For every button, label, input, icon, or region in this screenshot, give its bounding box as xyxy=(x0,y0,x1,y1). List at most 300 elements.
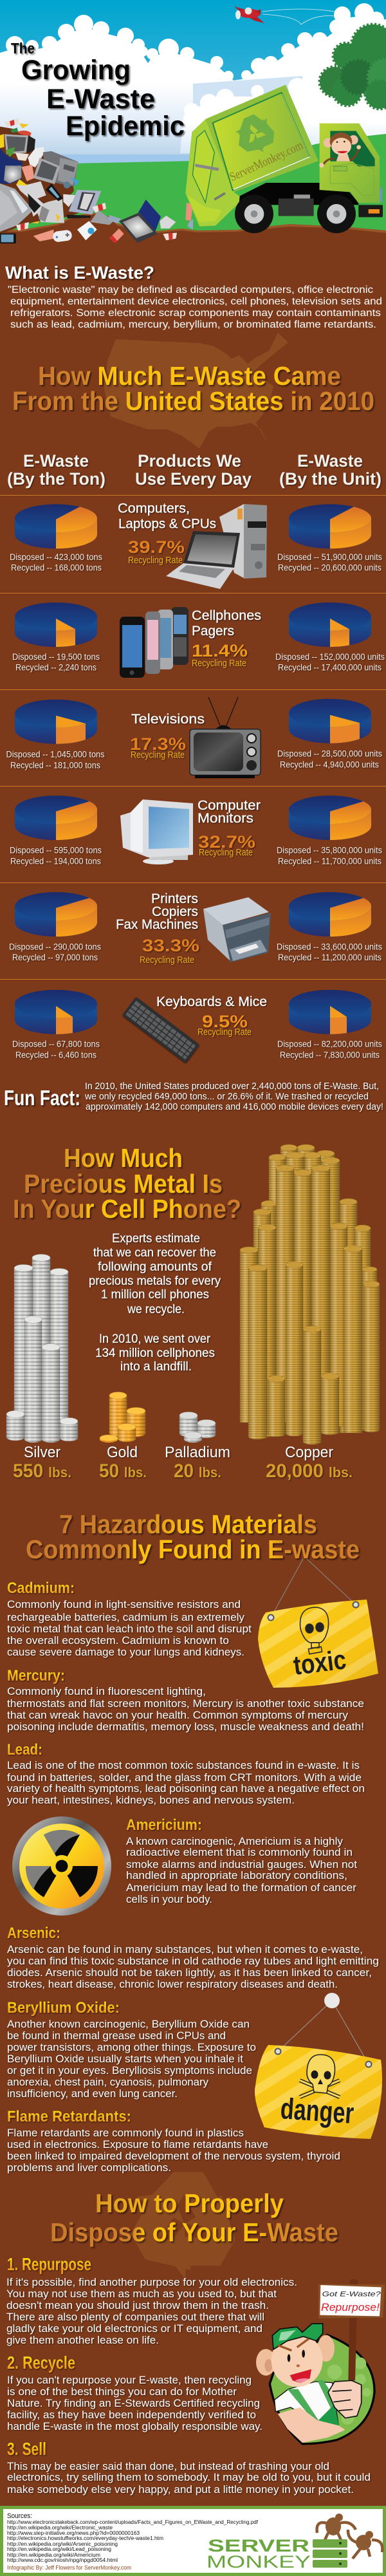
heading: hazardous materials: Commonly Found in E-waste xyxy=(26,1535,360,1564)
tons text xyxy=(12,1040,100,1059)
americium text xyxy=(126,1835,357,1905)
pie: tv by ton xyxy=(15,700,97,744)
recycling rate: Recycling Rate xyxy=(199,848,253,858)
americium text: cells in your body. xyxy=(126,1893,212,1905)
repurpose text: If it's possible, find another purpose for your old electronics. xyxy=(6,2276,297,2288)
hazard: flame retardants xyxy=(7,2108,340,2174)
navy monitor xyxy=(0,148,23,184)
units text: Disposed -- 33,600,000 units xyxy=(277,942,382,951)
pie: computers by ton xyxy=(15,504,97,548)
beryllium text: Beryllium Oxide usually starts when you inhale it xyxy=(7,2053,243,2065)
recycling rate xyxy=(192,641,248,669)
pie: tv by unit xyxy=(289,699,371,743)
experts text: precious metals for every xyxy=(89,1274,221,1288)
product label: Fax Machines xyxy=(116,917,198,932)
pie: computers by unit xyxy=(289,504,371,548)
red cup xyxy=(92,203,106,213)
tons text: Disposed -- 19,500 tons xyxy=(12,652,100,662)
tons text: Recycled -- 194,000 tons xyxy=(10,856,101,866)
sources: http://www.cdc.gov/niosh/npg/npgd0054.html xyxy=(7,2557,118,2563)
product label: Copiers xyxy=(152,904,198,919)
icon: recycle watermark xyxy=(116,2172,251,2291)
product label xyxy=(198,798,261,826)
repurpose text: doesn't mean you should just throw them in the trash. xyxy=(6,2299,269,2311)
units text xyxy=(277,942,382,962)
fact text: we only recycled 649,000 tons... or 26.6% of it. We trashed or recycled xyxy=(84,1091,369,1102)
hazard: cadmium xyxy=(7,1580,252,1658)
sign board: Got E-Waste? xyxy=(322,2290,381,2298)
units text: Recycled -- 7,830,000 units xyxy=(280,1050,380,1059)
tons text: Recycled -- 2,240 tons xyxy=(15,663,96,673)
green field xyxy=(0,134,386,270)
server monkey logo: MONKEY xyxy=(207,2552,311,2571)
sign post xyxy=(348,2279,358,2380)
units text: Recycled -- 17,400,000 units xyxy=(278,663,381,673)
hazard: americium: Americium: xyxy=(126,1816,202,1834)
silver xyxy=(13,1444,71,1482)
container xyxy=(205,85,318,192)
flame retardants text: problems and liver complications. xyxy=(7,2161,171,2174)
row: monitors xyxy=(10,796,382,866)
step 2: recycle xyxy=(7,2353,262,2432)
recycling rate: 9.5% xyxy=(202,1012,248,1031)
units text: Disposed -- 82,200,000 units xyxy=(277,1040,382,1049)
beryllium text xyxy=(7,2018,256,2100)
repurpose text: There are also plenty of companies out there that will xyxy=(6,2311,264,2323)
recycling rate xyxy=(130,734,186,761)
flame retardants text xyxy=(7,2127,340,2174)
clouds xyxy=(0,3,386,167)
dark monitor xyxy=(5,134,35,154)
row: cellphones xyxy=(12,602,385,678)
arsenic text: diodes. Arsenic should not be taken lightly, as it has been linked to cancer, xyxy=(7,1966,372,1979)
truck lettering: ServerMonkey.com xyxy=(228,139,305,184)
title: The xyxy=(11,40,35,57)
recycling rate xyxy=(198,1012,252,1038)
mercury text: poisoning include dermatitis, memory loss, muscle weakness and death! xyxy=(7,1721,364,1733)
arsenic text xyxy=(7,1943,379,1990)
beryllium text: insufficiency, and even lung cancer. xyxy=(7,2087,178,2100)
palladium xyxy=(165,1444,230,1482)
hazard: lead: Lead: xyxy=(7,1741,42,1759)
sources: Sources: xyxy=(7,2512,32,2520)
experts text xyxy=(89,1232,221,1374)
wheels xyxy=(235,194,356,233)
experts text: 1 million cell phones xyxy=(101,1288,209,1302)
sell text xyxy=(7,2460,371,2496)
units text: Recycled -- 4,940,000 units xyxy=(280,760,379,769)
sell text: make somebody else very happy, and put a little money in your pocket. xyxy=(7,2483,354,2496)
silver: Silver xyxy=(24,1444,60,1461)
units text: Disposed -- 28,500,000 units xyxy=(277,749,382,759)
tons text: Recycled -- 97,000 tons xyxy=(12,953,98,962)
tons text xyxy=(12,652,100,673)
smartphone xyxy=(46,183,63,201)
heading: What is E-Waste? xyxy=(5,263,154,283)
icon: printer xyxy=(203,897,271,962)
hazard: americium xyxy=(126,1816,357,1905)
column headers: E-Waste xyxy=(297,451,363,471)
repurpose text xyxy=(6,2276,297,2346)
step 2: recycle: 2. Recycle xyxy=(7,2353,75,2373)
heading: how to dispose: Dispose of Your E-Waste xyxy=(50,2217,338,2247)
grey crt and tower xyxy=(33,151,78,187)
lead text xyxy=(7,1759,365,1806)
cadmium text xyxy=(7,1598,252,1658)
beryllium text: anorexia, chest pain, cyanosis, pulmonary xyxy=(7,2076,208,2088)
lower cloud layer xyxy=(180,76,386,154)
tons text xyxy=(6,750,105,770)
rear door xyxy=(185,119,240,227)
column headers: Products We xyxy=(138,451,241,471)
bumper xyxy=(358,188,383,217)
pile backing xyxy=(0,127,92,234)
monkey body xyxy=(275,2380,362,2443)
experts text: that we can recover the xyxy=(93,1246,216,1260)
definition text xyxy=(8,285,382,330)
units text: Disposed -- 35,800,000 units xyxy=(277,846,382,855)
heading: how to dispose: How to Properly xyxy=(95,2189,284,2218)
flame retardants text: Flame retardants are commonly found in plastics xyxy=(7,2127,244,2139)
monkey mascot with sign xyxy=(256,2279,385,2444)
sources: http://www.electronicstakeback.com/wp-content/uploads/Facts_and_Figures_on_EWaste_and_Recycling.pdf xyxy=(7,2519,259,2525)
cab xyxy=(320,124,380,203)
pie: cellphones by unit xyxy=(289,602,371,647)
header illustration xyxy=(0,0,386,283)
product label: Cellphones xyxy=(192,608,261,623)
title: E-Waste xyxy=(46,84,155,115)
cadmium text: the overall ecosystem. Cadmium is known to xyxy=(7,1634,229,1647)
tons text xyxy=(10,552,102,573)
lead text: found in batteries, solder, and the glass from CRT monitors. With a wide xyxy=(7,1771,362,1784)
experts text: 134 million cellphones xyxy=(95,1347,215,1360)
repurpose text: give them another lease on life. xyxy=(6,2334,159,2346)
product label: Computers, xyxy=(118,501,190,516)
loose items xyxy=(0,221,177,243)
heading: hazardous materials: 7 Hazardous Materials xyxy=(59,1509,317,1539)
units text: Disposed -- 51,900,000 units xyxy=(277,552,382,562)
recycle text: If you can't repurpose your E-waste, then recycling xyxy=(7,2374,252,2386)
pie: printers by unit xyxy=(289,892,371,937)
pie: keyboards by ton xyxy=(15,990,97,1034)
hazard: lead xyxy=(7,1741,365,1806)
step 1: repurpose: 1. Repurpose xyxy=(7,2254,91,2274)
tons text: Disposed -- 423,000 tons xyxy=(10,552,102,562)
recycling rate xyxy=(198,832,255,858)
step 3: sell xyxy=(7,2439,371,2496)
cadmium text: toxic metal that can leach into the soil and disrupt xyxy=(7,1623,252,1635)
palladium: Palladium xyxy=(165,1444,230,1461)
mercury text: that can wreak havoc on your health. Common symptoms of mercury xyxy=(7,1709,349,1721)
sources: http://www.step-initiative.org/news.php?id=0000000163 xyxy=(7,2530,140,2536)
product label: Televisions xyxy=(131,712,205,727)
sign board: Repurpose! xyxy=(321,2301,380,2313)
toxic sign xyxy=(254,1559,383,1690)
icon: tv xyxy=(190,697,261,778)
icon: radiation symbol xyxy=(12,1816,111,1916)
step 3: sell: 3. Sell xyxy=(7,2439,46,2459)
recycling rate: Recycling Rate xyxy=(131,751,185,761)
fun fact xyxy=(4,1081,383,1112)
flame retardants text: used in electronics. Exposure to flame retardants have xyxy=(7,2138,268,2151)
definition text: refrigerators. Some electronic scrap components may contain contaminants xyxy=(10,308,381,319)
junk pile xyxy=(0,118,193,243)
recycle text xyxy=(7,2374,262,2432)
units text xyxy=(275,652,385,673)
icon: crt monitor xyxy=(120,799,193,864)
arsenic text: you can find this toxic substance in old cathode ray tubes and light emitting xyxy=(7,1955,379,1967)
badge circle xyxy=(270,2335,374,2444)
top trash xyxy=(0,118,32,148)
column headers: (By the Ton) xyxy=(7,469,106,489)
heading: precious metal: How Much xyxy=(64,1143,183,1173)
americium text: smoke alarms and industrial gauges. When not xyxy=(126,1858,357,1871)
danger sign xyxy=(251,1993,386,2143)
recycling rate: Recycling Rate xyxy=(198,1027,252,1038)
cadmium text: Commonly found in light-sensitive resistors and xyxy=(7,1598,241,1610)
monkey head xyxy=(256,2324,335,2387)
units text: Recycled -- 11,700,000 units xyxy=(278,856,381,866)
hazard: arsenic: Arsenic: xyxy=(7,1925,60,1942)
icon: keyboard xyxy=(122,996,199,1063)
sell text: This may be easier said than done, but instead of trashing your old xyxy=(7,2460,329,2472)
product label xyxy=(192,608,261,639)
americium text: Americium may lead to the formation of cancer xyxy=(126,1881,356,1894)
pie: cellphones by ton xyxy=(15,602,97,647)
logo server stack xyxy=(313,2539,347,2568)
palladium coin stacks xyxy=(179,1412,216,1442)
fact text xyxy=(84,1081,383,1112)
garbage truck xyxy=(185,85,383,233)
palladium: 20 lbs. xyxy=(174,1461,221,1482)
pie: keyboards by unit xyxy=(289,990,371,1034)
copper stacks xyxy=(240,1144,380,1444)
recycle text: is one of the best things you can do for Mother xyxy=(7,2385,237,2398)
arsenic text: Arsenic can be found in many substances, but when it comes to e-waste, xyxy=(7,1943,363,1955)
product label xyxy=(116,891,198,932)
step 1: repurpose xyxy=(6,2254,297,2346)
panel xyxy=(213,93,309,191)
column headers: E-Waste xyxy=(23,451,89,471)
recycling rate: 39.7% xyxy=(128,537,185,557)
what is e-waste xyxy=(5,263,382,330)
experts text: following amounts of xyxy=(98,1260,212,1274)
lead text: your heart, intestines, kidneys, bones and nervous system. xyxy=(7,1794,295,1806)
sources: http://electronics.howstuffworks.com/everyday-tech/e-waste1.htm xyxy=(7,2535,163,2541)
sign text: toxic: toxic xyxy=(291,1644,347,1681)
sources: http://en.wikipedia.org/wiki/Americium xyxy=(7,2552,100,2558)
product label: Keyboards & Mice xyxy=(156,994,267,1009)
copper: Copper xyxy=(285,1444,333,1461)
heading: precious metal: In Your Cell Phone? xyxy=(13,1194,241,1224)
product label xyxy=(118,501,216,532)
server monkey logo xyxy=(207,2514,382,2571)
experts text: Experts estimate xyxy=(112,1232,200,1246)
recycling rate: Recycling Rate xyxy=(140,955,194,966)
pie: monitors by unit xyxy=(289,796,371,840)
recycle symbol xyxy=(225,107,287,166)
recycling rate: 33.3% xyxy=(142,936,199,955)
hazard: beryllium oxide xyxy=(7,1999,256,2100)
units text xyxy=(277,552,382,573)
experts text: into a landfill. xyxy=(120,1360,192,1374)
airplane xyxy=(234,6,335,24)
product label: Monitors xyxy=(198,811,253,826)
gold xyxy=(99,1444,147,1482)
tons text: Recycled -- 168,000 tons xyxy=(11,563,102,573)
cadmium text: cause severe damage to your lungs and kidneys. xyxy=(7,1646,244,1658)
product label: Printers xyxy=(151,891,198,906)
silver coin stacks xyxy=(6,1254,78,1442)
units text xyxy=(277,1040,382,1059)
recycling rate xyxy=(128,537,185,566)
recycling rate: Recycling Rate xyxy=(128,555,183,566)
definition text: "Electronic waste" may be defined as discarded computers, office electronic xyxy=(8,285,373,295)
row: televisions xyxy=(6,697,382,778)
title: Growing xyxy=(21,55,131,86)
recycle text: facility, as they have been independently verified to xyxy=(7,2409,256,2421)
pie: monitors by ton xyxy=(15,796,97,840)
sources: http://en.wikipedia.org/wiki/Arsenic_poisoning xyxy=(7,2541,118,2547)
hazard: arsenic xyxy=(7,1925,379,1990)
credit: Infographic By: Jeff Flowers for ServerMonkey.com xyxy=(7,2564,131,2571)
column headers: (By the Unit) xyxy=(279,469,381,489)
recycling rate: 17.3% xyxy=(130,734,186,754)
footer xyxy=(0,2506,386,2576)
mercury text xyxy=(7,1685,364,1733)
hazard: beryllium oxide: Beryllium Oxide: xyxy=(7,1999,120,2017)
product label: Laptops & CPUs xyxy=(118,517,216,532)
experts text: we recycle. xyxy=(127,1303,185,1316)
heading: how much e-waste came from the us xyxy=(12,361,374,416)
hazard: mercury xyxy=(7,1667,364,1733)
lead text: Lead is one of the most common toxic substances found in e-waste. It is xyxy=(7,1759,360,1771)
americium text: handled in appropriate laboratory conditions, xyxy=(126,1869,347,1881)
copper: 20,000 lbs. xyxy=(266,1461,353,1482)
tree xyxy=(320,24,386,109)
gears xyxy=(327,2357,371,2425)
mercury text: Commonly found in fluorescent lighting, xyxy=(7,1685,206,1697)
title xyxy=(11,40,185,142)
keyboard xyxy=(66,190,101,218)
recycle text: Nature. Try finding an E-Stewards Certified recycling xyxy=(7,2397,260,2409)
gold: 50 lbs. xyxy=(99,1461,147,1482)
experts text: In 2010, we sent over xyxy=(99,1332,211,1346)
logo text: SERVER xyxy=(208,2536,309,2555)
tons text: Recycled -- 181,000 tons xyxy=(10,760,100,770)
tons text: Recycled -- 6,460 tons xyxy=(15,1050,96,1059)
recycling rate: 32.7% xyxy=(198,832,255,852)
heading: precious metal xyxy=(13,1143,241,1224)
definition text: such as lead, cadmium, mercury, beryllium, or brominated flame retardants. xyxy=(10,319,376,330)
hazard: mercury: Mercury: xyxy=(7,1667,65,1685)
beryllium text: Another known carcinogenic, Beryllium Oxide can xyxy=(7,2018,250,2030)
row: keyboards xyxy=(12,990,382,1063)
americium text: radioactive element that is commonly found in xyxy=(126,1846,353,1858)
recycling rate: 11.4% xyxy=(192,641,248,660)
icon: phones xyxy=(120,607,188,678)
americium text: A known carcinogenic, Americium is a highly xyxy=(126,1835,344,1847)
icon: skull xyxy=(300,2055,340,2097)
units text: Recycled -- 20,600,000 units xyxy=(278,563,381,573)
units text: Recycled -- 11,200,000 units xyxy=(278,953,381,962)
recycling rate xyxy=(140,936,199,966)
chassis xyxy=(239,183,358,205)
mercury text: thermostats and flat screen monitors, Mercury is another toxic substance xyxy=(7,1697,364,1710)
column headers: Use Every Day xyxy=(135,469,252,489)
beryllium text: or get it in your eyes. Berylliosis symptoms include xyxy=(7,2064,252,2077)
heading: how much e-waste came from the us: How Much E-Waste Came xyxy=(38,361,341,391)
crumpled plastics xyxy=(16,179,77,223)
tons text: Disposed -- 290,000 tons xyxy=(9,942,101,951)
silver case xyxy=(0,183,33,232)
label: Fun Fact: xyxy=(4,1086,80,1110)
icon: tower and laptop xyxy=(166,504,267,589)
recycling rate: Recycling Rate xyxy=(192,658,246,669)
heading: hazardous materials xyxy=(26,1509,360,1564)
repurpose text: gladly take your old electronics or IT equipment, and xyxy=(6,2322,262,2335)
icon: gas mask xyxy=(300,1607,329,1654)
logo monkeys xyxy=(317,2514,382,2559)
tons text: Disposed -- 1,045,000 tons xyxy=(6,750,105,760)
sources xyxy=(7,2512,259,2563)
column headers xyxy=(7,451,381,489)
units text xyxy=(277,749,382,769)
repurpose text: You may not use them as much as you used to, but that xyxy=(6,2288,277,2300)
tons text: Disposed -- 595,000 tons xyxy=(10,846,102,855)
sign text: danger: danger xyxy=(279,2091,355,2130)
beryllium text: power transistors, among other things. Exposure to xyxy=(7,2041,256,2053)
gold coin stacks xyxy=(100,1392,145,1442)
gold: Gold xyxy=(107,1444,138,1461)
sign board xyxy=(318,2284,385,2319)
driver monkey xyxy=(319,133,361,167)
sources: http://en.wikipedia.org/wiki/Electronic_waste xyxy=(7,2525,113,2531)
product label: Computer xyxy=(198,798,261,813)
definition text: equipment, entertainment device electronics, cell phones, television sets and xyxy=(10,296,382,307)
us map background xyxy=(104,333,288,449)
lead text: variety of health symptoms, lead poisoning can have a negative effect on xyxy=(7,1782,365,1795)
sources: http://en.wikipedia.org/wiki/Lead_poisoning xyxy=(7,2546,111,2552)
sell text: electronics, try selling them to somebody. It may be old to you, but it could xyxy=(7,2471,371,2483)
hazard: flame retardants: Flame Retardants: xyxy=(7,2108,131,2125)
product label: Pagers xyxy=(192,624,234,639)
recycle text: handle E-waste in the most globally responsible way. xyxy=(7,2420,262,2432)
heading: how to dispose xyxy=(50,2189,338,2247)
tons text xyxy=(9,942,101,962)
pie: printers by ton xyxy=(15,892,97,937)
fuel tank xyxy=(279,194,314,216)
silver: 550 lbs. xyxy=(13,1461,71,1482)
arsenic text: strokes, heart disease, chronic lower respiratory diseases and death. xyxy=(7,1978,338,1990)
horizon band xyxy=(0,154,309,165)
hazard: cadmium: Cadmium: xyxy=(7,1580,75,1597)
copper xyxy=(266,1444,353,1482)
navy crt tv xyxy=(119,200,161,243)
ground xyxy=(0,212,386,283)
flame retardants text: been linked to impaired development of the nervous system, thyroid xyxy=(7,2150,340,2162)
heading: precious metal: Precious Metal Is xyxy=(24,1169,223,1199)
units text xyxy=(277,846,382,866)
row: printers xyxy=(9,891,382,966)
cadmium text: rechargeable batteries, cadmium is an extremely xyxy=(7,1611,244,1623)
tons text xyxy=(10,846,102,866)
row: computers xyxy=(10,501,382,589)
metal labels xyxy=(13,1444,353,1482)
title: Epidemic xyxy=(66,111,185,142)
beryllium text: be found in thermal grease used in CPUs and xyxy=(7,2030,226,2042)
sky xyxy=(0,0,386,167)
